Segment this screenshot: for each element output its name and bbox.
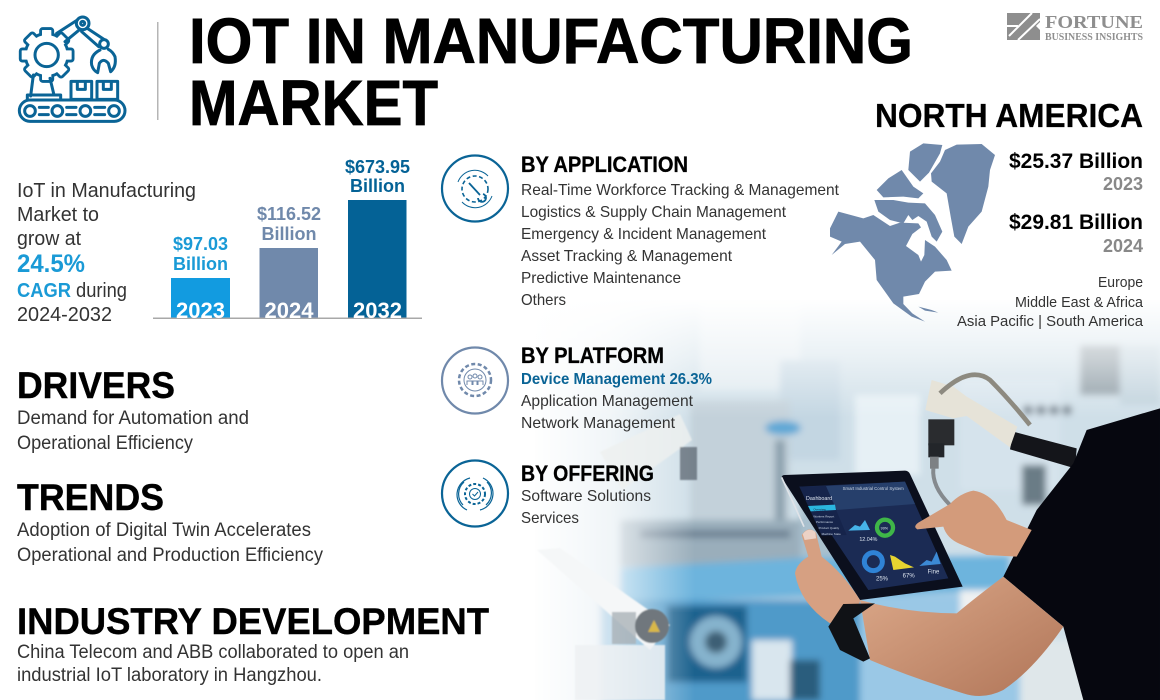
north america values: $25.37 Billion xyxy=(1009,150,1143,173)
tablet with dashboard: Overview xyxy=(813,508,827,512)
logo: Fortune Business Insights: BUSINESS INSIGHTS xyxy=(1045,32,1143,43)
CAGR text block: IoT in Manufacturing xyxy=(17,180,196,202)
bar chart: market size: 2024 xyxy=(265,298,314,323)
title xyxy=(189,5,913,139)
bar chart: market size: Billion xyxy=(173,254,228,274)
CAGR text block: grow at xyxy=(17,228,81,250)
CAGR text block: Market to xyxy=(17,204,99,226)
icon: robotic arm on conveyor xyxy=(19,17,125,121)
by platform list xyxy=(521,343,712,432)
by offering list xyxy=(521,461,654,527)
tablet with dashboard: Smart Industrial Control System xyxy=(843,486,904,491)
CAGR text block: 24.5% xyxy=(17,250,85,278)
CAGR text block xyxy=(17,180,196,326)
bar chart: market size: $673.95 xyxy=(345,157,410,177)
icon: by offering xyxy=(442,460,508,526)
by application list: Real-Time Workforce Tracking & Management xyxy=(521,182,840,199)
bar chart: market size: $97.03 xyxy=(173,234,228,254)
bar chart: market size: 2023 xyxy=(176,298,225,323)
tablet with dashboard: 99% xyxy=(881,527,889,531)
north america values xyxy=(1009,150,1143,256)
by application list: Predictive Maintenance xyxy=(521,270,681,287)
background photo: factory xyxy=(410,270,1160,700)
tablet with dashboard: Machine State xyxy=(822,532,841,536)
industrial robot arm xyxy=(925,375,1077,505)
bar chart: market size: $116.52 xyxy=(257,204,321,224)
trends: Operational and Production Efficiency xyxy=(17,545,323,566)
by platform list: Device Management 26.3% xyxy=(521,371,712,388)
by offering list: Services xyxy=(521,510,579,527)
CAGR text block: CAGR during xyxy=(17,280,127,302)
tablet with dashboard: Dashboard xyxy=(806,496,832,502)
industry development: industrial IoT laboratory in Hangzhou. xyxy=(17,665,322,686)
north america values: 2023 xyxy=(1103,174,1143,194)
trends: TRENDS xyxy=(17,477,164,518)
wristwatch xyxy=(828,603,875,662)
icon: by platform xyxy=(442,348,508,414)
tablet with dashboard: 12.04% xyxy=(859,537,878,543)
tablet with dashboard: Workers Report xyxy=(813,514,834,518)
tablet with dashboard: Performance xyxy=(816,520,833,524)
other regions: Middle East & Africa xyxy=(1015,294,1144,311)
north america values: 2024 xyxy=(1103,236,1143,256)
background robot arms xyxy=(537,414,697,700)
by application list xyxy=(521,152,840,309)
tablet with dashboard: 25% xyxy=(876,577,889,583)
title: MARKET xyxy=(189,67,438,139)
map: North America xyxy=(830,143,995,322)
drivers: Demand for Automation and xyxy=(17,408,249,429)
person: forearm xyxy=(860,577,1063,696)
by application list: BY APPLICATION xyxy=(521,152,688,177)
industry development: China Telecom and ABB collaborated to open an xyxy=(17,642,409,663)
by application list: Asset Tracking & Management xyxy=(521,248,733,265)
tablet with dashboard: Fine xyxy=(928,569,940,575)
tablet with dashboard: Product Quality xyxy=(819,526,840,530)
person: black shirt xyxy=(1003,408,1160,700)
tablet with dashboard xyxy=(782,471,963,600)
drivers xyxy=(17,365,249,454)
by offering list: BY OFFERING xyxy=(521,461,654,486)
logo: Fortune Business Insights: FORTUNE xyxy=(1045,12,1143,32)
by application list: Others xyxy=(521,292,566,309)
north america heading: NORTH AMERICA xyxy=(875,97,1143,134)
trends: Adoption of Digital Twin Accelerates xyxy=(17,520,311,541)
bar chart: market size: 2032 xyxy=(353,298,402,323)
title: IOT IN MANUFACTURING xyxy=(189,5,913,77)
other regions: Europe xyxy=(1098,274,1143,291)
drivers: DRIVERS xyxy=(17,365,175,406)
industry development: INDUSTRY DEVELOPMENT xyxy=(17,601,489,642)
person: hand holding tablet xyxy=(795,529,860,623)
other regions: Asia Pacific | South America xyxy=(957,313,1144,330)
bar chart: market size: Billion xyxy=(350,176,405,196)
tablet with dashboard: 67% xyxy=(903,573,915,579)
industry development xyxy=(17,601,489,686)
by platform list: Application Management xyxy=(521,393,694,410)
by application list: Emergency & Incident Management xyxy=(521,226,767,243)
by platform list: BY PLATFORM xyxy=(521,343,664,368)
by platform list: Network Management xyxy=(521,415,676,432)
person: hand pointing at tablet xyxy=(915,491,1032,557)
drivers: Operational Efficiency xyxy=(17,433,193,454)
logo: Fortune Business Insights xyxy=(1007,12,1143,43)
other regions xyxy=(957,274,1144,330)
bar chart: market size: Billion xyxy=(262,224,316,244)
bar chart: market size xyxy=(153,157,422,323)
trends xyxy=(17,477,323,566)
CAGR text block: 2024-2032 xyxy=(17,304,112,326)
divider line xyxy=(157,22,158,120)
north america values: $29.81 Billion xyxy=(1009,211,1143,234)
by application list: Logistics & Supply Chain Management xyxy=(521,204,787,221)
by offering list: Software Solutions xyxy=(521,488,651,505)
icon: by application xyxy=(442,156,508,222)
